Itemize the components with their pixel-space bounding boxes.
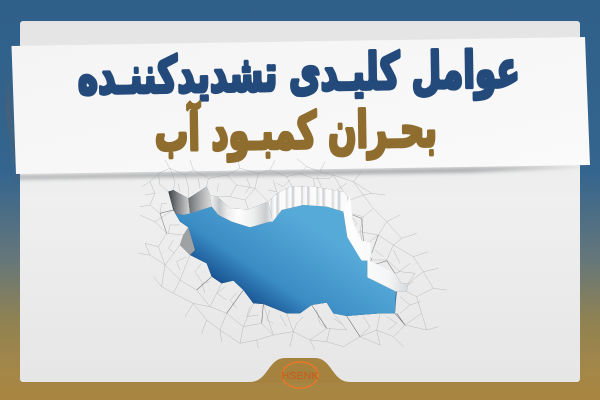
wall: west, shaded xyxy=(180,227,195,255)
wall: north, white ridges xyxy=(210,195,273,227)
banner shadow xyxy=(6,70,590,179)
logo: HSENK: HSENK xyxy=(282,371,319,382)
panel: title banner xyxy=(12,37,590,174)
footer gold tab xyxy=(20,358,580,383)
wall: north west, shaded xyxy=(168,190,190,215)
map: cracked Iran-shaped hole xyxy=(138,157,447,350)
blue floor of the hole xyxy=(175,205,396,316)
wall: north east, vertical ridges xyxy=(268,186,350,222)
darker cracks near the east rim xyxy=(160,210,405,337)
cast shadow inside the hole xyxy=(168,186,408,316)
logo: HSENK xyxy=(282,362,319,388)
wall: east, white ridges xyxy=(343,195,408,292)
wall: north west second facet xyxy=(188,187,212,213)
heading: line two: بحـران کمبـود آب xyxy=(154,98,437,163)
cracks around the hole xyxy=(138,157,447,350)
